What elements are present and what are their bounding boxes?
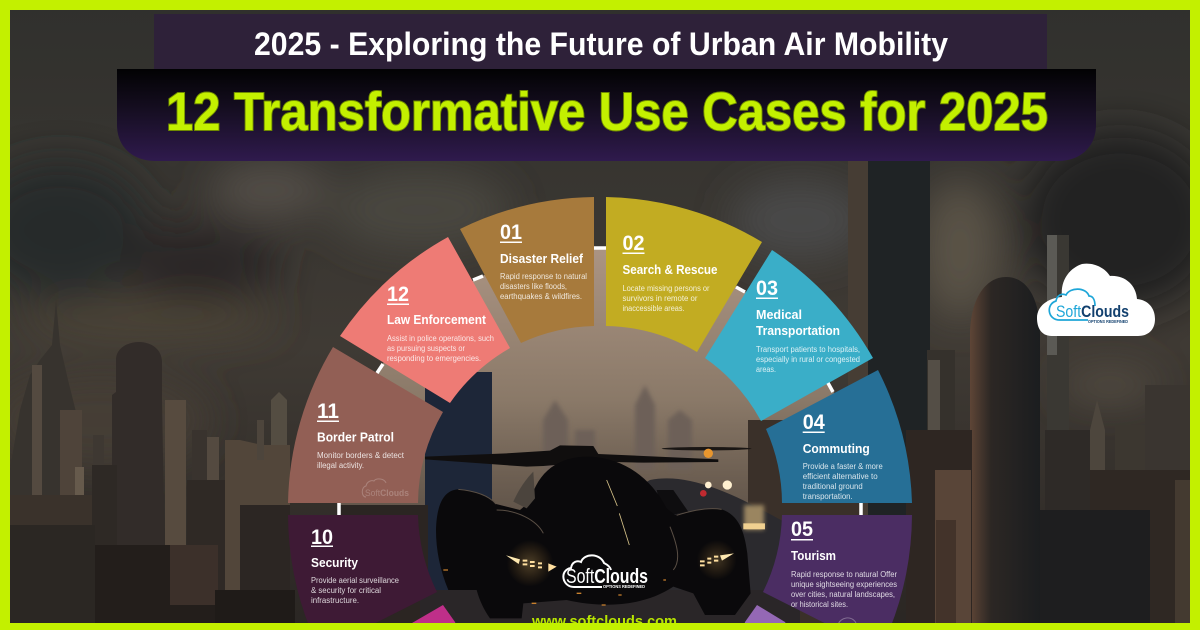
windshield reflection	[607, 480, 629, 545]
subtitle banner	[154, 14, 1047, 69]
panel: 04 Commuting: Commuting	[803, 441, 870, 456]
panel: 04 Commuting: transportation.	[803, 492, 853, 501]
panel: 10 Security: infrastructure.	[311, 596, 359, 605]
right headlight	[697, 540, 737, 580]
rotor arm	[425, 445, 718, 467]
body rim highlights	[458, 489, 722, 570]
panel: 02 Search & Rescue: 02	[622, 232, 644, 255]
panel: 11 Border Patrol	[288, 347, 443, 503]
panel: 12 Law Enforcement: as pursuing suspects or	[387, 344, 465, 353]
panel: 05 Tourism: unique sightseeing experiences	[791, 580, 897, 589]
panel: 10 Security: & security for critical	[311, 586, 381, 595]
panel: 11 Border Patrol: Monitor borders & detect	[317, 451, 405, 460]
panel: 03 Medical Transportation: 03	[756, 277, 778, 300]
subtitle banner: 2025 - Exploring the Future of Urban Air Mobility	[254, 26, 948, 62]
background: right skyline	[848, 160, 1190, 630]
car body silhouette	[436, 457, 751, 618]
panel: 01 Disaster Relief: earthquakes & wildfires.	[500, 292, 582, 301]
flying car	[425, 445, 765, 618]
logo wordmark: SoftClouds	[1056, 302, 1129, 321]
left headlight	[506, 540, 557, 587]
panel: 10 Security: Security	[311, 555, 359, 570]
panel: 01 Disaster Relief: Disaster Relief	[500, 251, 584, 266]
panel: 02 Search & Rescue	[606, 197, 762, 352]
canopy side window	[513, 472, 535, 508]
panel: 04 Commuting: traditional ground	[803, 482, 863, 491]
underbody amber lights	[443, 570, 666, 605]
panel: 10 Security: 10	[311, 526, 333, 549]
panel: 02 Search & Rescue: Locate missing persons or	[622, 284, 710, 293]
panel: 05 Tourism	[763, 515, 912, 630]
logo cloud outline	[1049, 289, 1095, 320]
panel: 04 Commuting: Provide a faster & more	[803, 462, 883, 471]
panel: 04 Commuting: 04	[803, 411, 825, 434]
panel: 05 Tourism: or historical sites.	[791, 600, 848, 609]
panel: 02 Search & Rescue: survivors in remote or	[622, 294, 698, 303]
panel: 12 Law Enforcement: 12	[387, 283, 409, 306]
background street lights	[700, 480, 765, 529]
rotor hub light	[704, 449, 713, 458]
panel: 05 Tourism: 05	[791, 518, 813, 541]
panel: 11 Border Patrol: 11	[317, 400, 339, 423]
panel: 03 Medical Transportation: Transportation	[756, 323, 840, 338]
panel: 03 Medical Transportation	[705, 250, 873, 421]
rotor blade behind the car	[662, 447, 752, 450]
panel: 06 partial segment	[740, 605, 795, 630]
title banner: 12 Transformative Use Cases for 2025	[166, 82, 1048, 142]
panel: 01 Disaster Relief: Rapid response to natural	[500, 272, 587, 281]
panel: 09 partial segment	[405, 605, 462, 630]
panel: 11 Border Patrol: illegal activity.	[317, 461, 364, 470]
title banner	[117, 69, 1096, 161]
logo strapline: OPTIONS REDEFINED	[1088, 319, 1129, 324]
panel: 02 Search & Rescue: Search & Rescue	[622, 262, 718, 277]
website url: www.softclouds.com	[531, 613, 677, 630]
rear fin right	[657, 490, 688, 517]
panel: 05 Tourism: over cities, natural landscapes,	[791, 590, 895, 599]
panel: 01 Disaster Relief: 01	[500, 221, 522, 244]
centre logo: SoftClouds white: OPTIONS REDEFINED	[603, 584, 646, 589]
centre logo: SoftClouds white: SoftClouds	[566, 566, 648, 588]
panel: 11 Border Patrol: Border Patrol	[317, 430, 394, 444]
panel: 01 Disaster Relief	[460, 197, 594, 343]
panel: 05 Tourism: Rapid response to natural Offer	[791, 570, 897, 579]
panel: 03 Medical Transportation: Transport patients to hospitals,	[756, 345, 860, 354]
panel: 05 Tourism: Tourism	[791, 548, 836, 563]
panel: 10 Security: Provide aerial surveillance	[311, 576, 400, 585]
background: left skyline	[10, 300, 295, 630]
panel: 02 Search & Rescue: inaccessible areas.	[622, 304, 684, 313]
watermark logo fragment	[838, 618, 856, 625]
centre logo: SoftClouds white	[563, 555, 648, 589]
panel: 03 Medical Transportation: areas.	[756, 365, 776, 374]
watermark logo: SoftClouds	[365, 488, 409, 498]
white tick separators	[339, 248, 861, 515]
panel: 12 Law Enforcement: Assist in police operations, such	[387, 334, 494, 343]
central haze circle with distant city	[338, 248, 863, 630]
logo: SoftClouds cloud badge	[1037, 264, 1155, 336]
watermark logo	[362, 479, 409, 498]
panel: 10 Security	[288, 515, 437, 630]
panel: 03 Medical Transportation: especially in rural or congested	[756, 355, 860, 364]
panel: 04 Commuting: efficient alternative to	[803, 472, 878, 481]
panel: 12 Law Enforcement: responding to emergencies.	[387, 354, 481, 363]
panel: 03 Medical Transportation: Medical	[756, 307, 802, 322]
panel: 12 Law Enforcement: Law Enforcement	[387, 312, 487, 327]
panel: 12 Law Enforcement	[340, 237, 510, 403]
panel: 01 Disaster Relief: disasters like floods,	[500, 282, 567, 291]
panel: 04 Commuting	[766, 370, 912, 503]
